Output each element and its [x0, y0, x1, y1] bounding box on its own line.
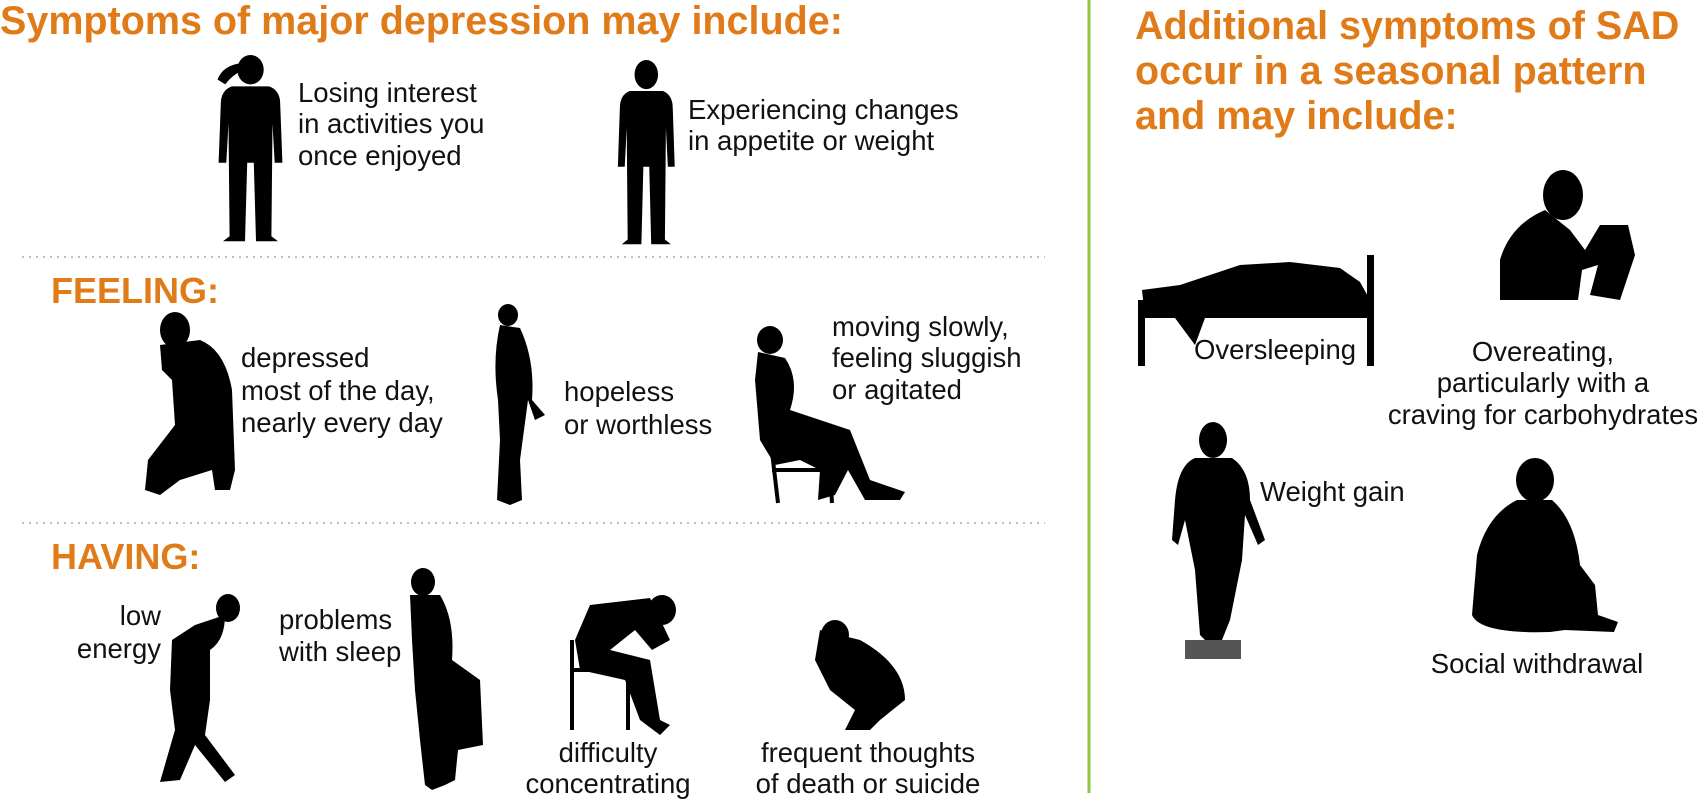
icon: eating	[1500, 170, 1635, 300]
text: low energy	[77, 600, 161, 664]
text: moving slowly: or agitated	[832, 374, 962, 405]
heading: feeling: FEELING:	[51, 270, 219, 311]
text: frequent thoughts: of death or suicide	[756, 768, 980, 799]
text: problems with sleep: with sleep	[278, 636, 401, 667]
text: hopeless: or worthless	[564, 409, 712, 440]
text: oversleeping: Oversleeping	[1194, 334, 1356, 365]
text: moving slowly: feeling sluggish	[832, 342, 1022, 373]
text: difficulty concentrating: concentrating	[525, 768, 691, 799]
text: low energy: energy	[77, 633, 161, 664]
icon: kneeling	[145, 312, 235, 495]
text: overeating: Overeating,	[1472, 336, 1614, 367]
icon: standing person	[618, 60, 675, 244]
icon: looking up	[495, 304, 545, 505]
text: losing interest: Losing interest	[298, 77, 477, 108]
icon: sitting withdrawn	[1472, 458, 1618, 632]
text: appetite: in appetite or weight	[688, 125, 934, 156]
text: frequent thoughts	[756, 737, 980, 799]
icon: person hand on head	[218, 55, 282, 241]
icon: crouching	[815, 620, 905, 730]
right title: Additional symptoms of SAD	[1135, 4, 1679, 48]
text: overeating	[1388, 336, 1698, 430]
text: hopeless: hopeless	[564, 376, 674, 407]
right title: and may include:	[1135, 94, 1458, 138]
text: appetite: Experiencing changes	[688, 94, 959, 125]
text: overeating: particularly with a	[1437, 367, 1650, 398]
heading: having: HAVING:	[51, 536, 200, 577]
text: problems with sleep	[278, 604, 401, 667]
text: depressed: nearly every day	[241, 407, 443, 438]
text: difficulty concentrating	[525, 737, 691, 799]
text: moving slowly	[832, 311, 1022, 405]
icon: standing with pillow	[410, 568, 483, 790]
text: appetite	[688, 94, 959, 156]
text: low energy: low	[120, 600, 161, 631]
text: losing interest: once enjoyed	[298, 140, 462, 171]
text: depressed: most of the day,	[241, 375, 435, 406]
text: overeating: craving for carbohydrates	[1388, 399, 1698, 430]
text: moving slowly: moving slowly,	[832, 311, 1009, 342]
text: losing interest: in activities you	[298, 108, 484, 139]
text: hopeless	[564, 376, 712, 440]
icon: bent walking	[160, 594, 240, 782]
right title	[1135, 4, 1679, 138]
icon: seated on chair	[755, 326, 905, 503]
text: depressed: depressed	[241, 342, 369, 373]
right title: occur in a seasonal pattern	[1135, 49, 1646, 93]
text: frequent thoughts: frequent thoughts	[761, 737, 975, 768]
text: problems with sleep: problems	[279, 604, 392, 635]
text: weight gain: Weight gain	[1260, 476, 1405, 507]
text: social withdrawal: Social withdrawal	[1431, 648, 1643, 679]
title: Symptoms of major depression may include:	[0, 0, 843, 43]
icon: bed	[1138, 255, 1374, 366]
text: depressed	[241, 342, 443, 438]
icon: sitting head in hands	[570, 595, 676, 735]
text: difficulty concentrating: difficulty	[559, 737, 658, 768]
icon: woman on scale	[1172, 422, 1265, 659]
text: losing interest	[298, 77, 484, 171]
